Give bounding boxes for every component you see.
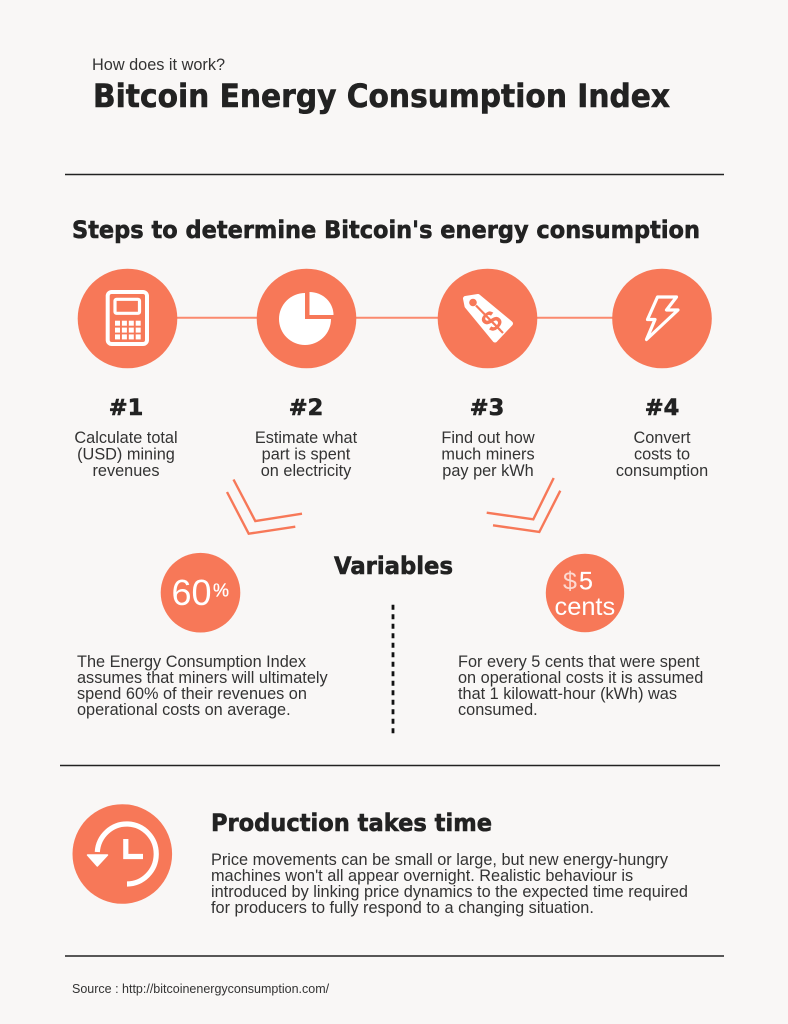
arrow: right double chevron — [487, 478, 560, 532]
step number: #1 — [109, 395, 143, 421]
variable text: that 1 kilowatt-hour (kWh) was — [458, 685, 677, 703]
heading: Production takes time — [211, 809, 492, 837]
section heading: steps: Steps to determine Bitcoin's energy consumption — [72, 216, 700, 244]
body text: Price movements can be small or large, but new energy-hungry — [211, 851, 669, 869]
step text: pay per kWh — [442, 462, 534, 480]
badge: $5 cents: cents — [554, 593, 615, 621]
badge: 60%: % — [213, 580, 229, 600]
source: Source : http://bitcoinenergyconsumption.com/ — [72, 982, 330, 996]
step text: Calculate total — [74, 429, 178, 447]
dashed separator — [392, 605, 394, 735]
variable text: For every 5 cents that were spent — [458, 653, 700, 671]
variable text: operational costs on average. — [77, 701, 291, 719]
icon: pie chart — [257, 269, 356, 368]
arrow: left double chevron — [227, 480, 302, 534]
step 4 — [612, 269, 712, 480]
step text: part is spent — [262, 446, 351, 464]
step text: Convert — [633, 429, 691, 447]
connector line between steps — [127, 317, 662, 319]
panel: production takes time — [72, 804, 688, 917]
step text: costs to — [634, 446, 690, 464]
body text: machines won't all appear overnight. Realistic behaviour is — [211, 867, 633, 885]
variable text: on operational costs it is assumed — [458, 669, 703, 687]
body text: introduced by linking price dynamics to the expected time required — [211, 883, 688, 901]
step 3 — [438, 269, 537, 480]
variable: 5 cents — [458, 554, 703, 719]
icon: lightning bolt — [612, 269, 712, 368]
icon: clock with back arrow — [72, 804, 172, 904]
badge: 60%: 60 — [172, 572, 212, 613]
badge: $5 cents: 5 — [579, 568, 593, 596]
variable text: assumes that miners will ultimately — [77, 669, 328, 687]
variable text: The Energy Consumption Index — [77, 653, 306, 671]
step text: much miners — [441, 446, 535, 464]
step text: on electricity — [261, 462, 352, 480]
badge: $5 cents — [546, 554, 624, 632]
badge: $5 cents: $ — [563, 568, 577, 596]
variable text: spend 60% of their revenues on — [77, 685, 307, 703]
icon: price tag — [438, 269, 537, 368]
variable: 60 percent — [77, 553, 328, 719]
step text: revenues — [93, 462, 159, 480]
step text: (USD) mining — [77, 446, 175, 464]
step number: #4 — [645, 395, 679, 421]
step 1 — [74, 269, 178, 480]
step text: consumption — [616, 462, 708, 480]
subtitle: How does it work? — [92, 56, 225, 74]
badge: 60% — [161, 553, 240, 632]
heading: variables: Variables — [334, 552, 453, 580]
icon: calculator — [78, 269, 177, 368]
variable text: consumed. — [458, 701, 538, 719]
title: Bitcoin Energy Consumption Index — [93, 77, 670, 115]
title block — [92, 56, 670, 115]
body text: for producers to fully respond to a changing situation. — [211, 899, 594, 917]
step number: #2 — [289, 395, 323, 421]
icon: price tag: $ — [475, 305, 509, 339]
step number: #3 — [470, 395, 504, 421]
step text: Find out how — [441, 429, 535, 447]
step text: Estimate what — [255, 429, 358, 447]
step 2 — [255, 269, 358, 480]
